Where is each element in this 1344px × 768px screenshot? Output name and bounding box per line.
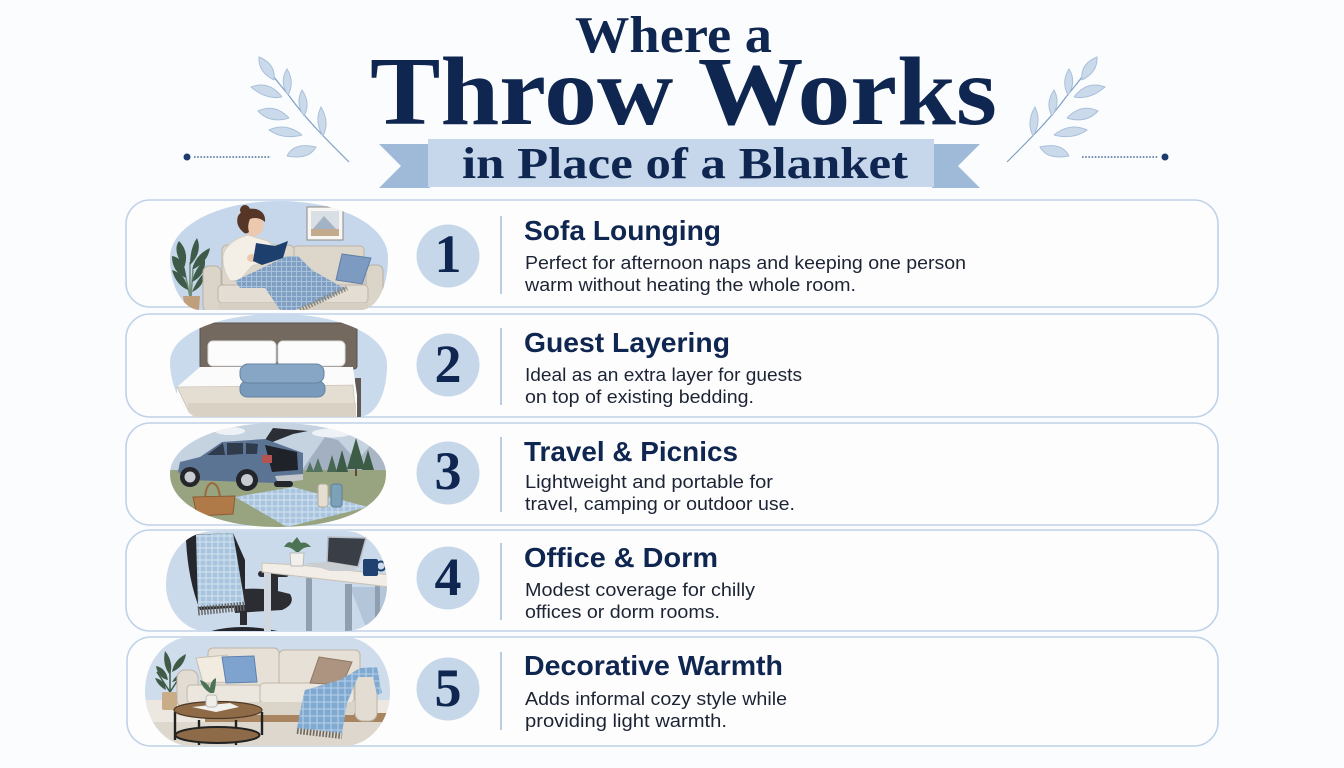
illustration: office chair with throw and desk <box>166 531 390 632</box>
number 5: 5 <box>434 658 462 718</box>
dotted ornament right <box>1082 154 1168 160</box>
illustration: woman reading on sofa <box>170 201 388 312</box>
text: decorative warmth: Decorative Warmth <box>524 650 783 681</box>
number 1 <box>416 224 480 288</box>
panel: travel and picnics <box>126 423 1218 528</box>
text: guest layering: Guest Layering <box>524 327 730 358</box>
panel: office and dorm <box>126 530 1218 632</box>
text: sofa lounging: Perfect for afternoon naps and keeping one person <box>525 252 966 273</box>
text: guest layering <box>524 327 802 407</box>
text: decorative warmth <box>524 650 787 731</box>
text: guest layering: on top of existing bedding. <box>525 386 754 407</box>
decorative laurel right <box>1007 57 1105 162</box>
text: travel and picnics: Lightweight and portable for <box>525 471 773 492</box>
number 4: 4 <box>434 547 462 607</box>
text: decorative warmth: providing light warmth. <box>525 710 727 731</box>
panel: sofa lounging <box>126 200 1218 312</box>
text: travel and picnics <box>524 436 795 514</box>
panel: decorative warmth <box>127 637 1218 746</box>
text: sofa lounging <box>524 215 966 295</box>
subtitle ribbon <box>379 139 980 188</box>
number 2: 2 <box>434 334 462 394</box>
text: office and dorm: Office & Dorm <box>524 542 718 573</box>
number 4 <box>416 546 480 610</box>
text: office and dorm: offices or dorm rooms. <box>525 601 720 622</box>
text: travel and picnics: Travel & Picnics <box>524 436 738 467</box>
text: guest layering: Ideal as an extra layer for guests <box>525 364 802 385</box>
text: sofa lounging: warm without heating the whole room. <box>524 274 856 295</box>
title: Throw Works <box>370 38 997 145</box>
text: sofa lounging: Sofa Lounging <box>524 215 721 246</box>
illustration: sofa with coffee table <box>145 637 390 746</box>
text: office and dorm: Modest coverage for chilly <box>525 579 756 600</box>
subtitle ribbon: in Place of a Blanket <box>462 139 908 188</box>
number 3 <box>416 441 480 504</box>
decorative laurel left <box>251 57 349 162</box>
number 2 <box>416 334 480 396</box>
number 3: 3 <box>434 441 462 501</box>
text: travel and picnics: travel, camping or outdoor use. <box>525 493 795 514</box>
dotted ornament left <box>184 154 271 160</box>
text: office and dorm <box>524 542 756 622</box>
number 5 <box>416 658 480 720</box>
panel: guest layering <box>126 314 1218 418</box>
infographic <box>125 16 1219 747</box>
illustration: bed with folded throw <box>170 314 387 418</box>
text: decorative warmth: Adds informal cozy style while <box>525 688 787 709</box>
illustration: car and picnic blanket <box>170 423 390 528</box>
title: Where a <box>575 7 772 64</box>
number 1: 1 <box>434 224 462 284</box>
